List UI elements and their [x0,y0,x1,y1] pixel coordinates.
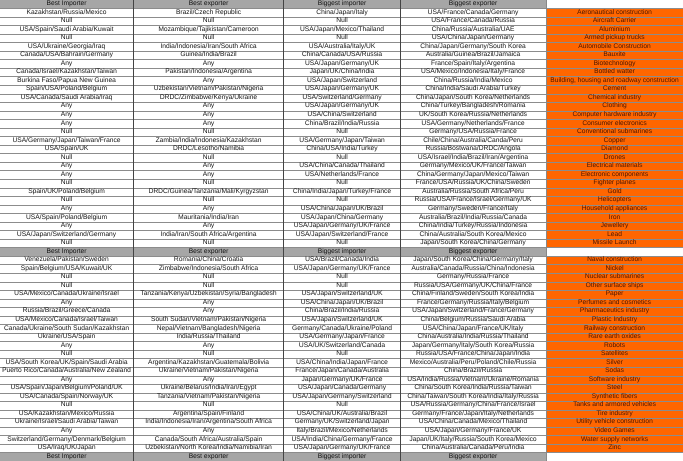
rows: section one, aeronautical construction to missile launch: USA/Japan/Germany/UK [305,60,379,67]
rows: section two, naval construction to zinc: Italy/Brazil/Mexico/Netherlands [296,427,388,434]
rows: section one, aeronautical construction to missile launch: Null [203,128,214,135]
rows: section two, naval construction to zinc: Synthetic fibers [592,393,637,400]
header row: top: Biggest exporter [449,0,497,7]
rows: section two, naval construction to zinc: Plastic Industry [592,316,637,323]
rows: section two, naval construction to zinc: USA/Japan/Germany/UK/France [294,265,390,272]
rows: section two, naval construction to zinc: India/Indonesia/Iran/Argentina/South Africa [145,418,272,425]
rows: section one, aeronautical construction to missile launch: Null [336,34,348,41]
rows: section one, aeronautical construction to missile launch: Any [61,111,72,118]
rows: section one, aeronautical construction to missile launch: Null [61,128,72,135]
rows: section one, aeronautical construction to missile launch: DRDC/Guinea/Tanzania/Mali/Kyrgyzstan [149,188,268,195]
header row: top: Best Importer [47,0,86,7]
rows: section one, aeronautical construction to missile launch: Germany/Mexico/UK/France/Taiwan [420,162,526,169]
rows: section two, naval construction to zinc: Naval construction [587,256,642,263]
rows: section one, aeronautical construction to missile launch: Copper [604,137,625,144]
rows: section two, naval construction to zinc: Rare earth oxides [588,333,641,340]
rows: section one, aeronautical construction to missile launch: China/Brazil/India/Russia [305,120,379,127]
rows: section two, naval construction to zinc: Any [203,299,214,306]
rows: section two, naval construction to zinc: France/Japan/Canada/Australia [295,367,389,374]
rows: section one, aeronautical construction to missile launch: France/Spain/Italy/Argentina [431,60,515,67]
rows: section two, naval construction to zinc: Canada/Ukraine/South Sudan/Kazakhstan [4,325,129,332]
rows: section one, aeronautical construction to missile launch: USA/Spain/Saudi Arabia/Kuwait [20,26,113,33]
rows: section one, aeronautical construction to missile launch: Mozambique/Tajikistan/Cameroon [158,26,259,33]
rows: section one, aeronautical construction to missile launch: Drones [604,154,625,161]
rows: section one, aeronautical construction to missile launch: Cement [603,85,626,92]
rows: section two, naval construction to zinc: Puerto Rico/Canada/Australia/New Zealand [2,367,131,374]
header row: bottom: Best Importer [47,453,86,460]
rows: section one, aeronautical construction to missile launch: Clothing [602,102,627,109]
rows: section two, naval construction to zinc: Japan/Germany/UK/France [301,376,383,383]
rows: section one, aeronautical construction to missile launch: Bottled watter [594,68,635,75]
rows: section one, aeronautical construction to missile launch: Lead [607,231,622,238]
rows: section one, aeronautical construction to missile launch: Japan/South Korea/China/Germany [420,239,526,246]
rows: section one, aeronautical construction to missile launch: Electronic components [581,171,648,178]
rows: section one, aeronautical construction to missile launch: Null [61,239,72,246]
rows: section two, naval construction to zinc: USA/Japan/Germany/UK/France [294,444,390,451]
rows: section one, aeronautical construction to missile launch: USA/Germany/Netherlands/France [421,120,525,127]
header row: top: Best exporter [189,0,228,7]
rows: section two, naval construction to zinc: Germany/Russia/France [437,273,509,280]
rows: section two, naval construction to zinc: Robots [604,342,625,349]
rows: section two, naval construction to zinc: China/Brazil/Russia [444,367,502,374]
header row: top: Biggest importer [318,0,366,7]
header row: middle: Best Importer [47,248,86,255]
rows: section one, aeronautical construction to missile launch: China/Canada/USA/Russia [302,51,382,58]
rows: section one, aeronautical construction to missile launch: Australia/Guinea/Brazil/Jamaica [426,51,520,58]
rows: section one, aeronautical construction to missile launch: India/Indonesia/Iran/South Africa [160,43,257,50]
rows: section two, naval construction to zinc: Null [336,282,348,289]
rows: section two, naval construction to zinc: Null [61,282,72,289]
rows: section one, aeronautical construction to missile launch: Any [61,102,72,109]
rows: section one, aeronautical construction to missile launch: Null [203,239,214,246]
rows: section one, aeronautical construction to missile launch: Null [336,239,348,246]
rows: section two, naval construction to zinc: USA/Japan/Germany/Switzerland [292,393,392,400]
rows: section one, aeronautical construction to missile launch: China/Australia/South Korea/Mexico [420,231,526,238]
rows: section one, aeronautical construction to missile launch: Aircraft Carrier [593,17,636,24]
rows: section two, naval construction to zinc: Venezuela/Pakistan/Sweden [24,256,109,263]
rows: section one, aeronautical construction to missile launch: Null [203,196,214,203]
rows: section two, naval construction to zinc: Romania/China/Croatia [174,256,243,263]
rows: section two, naval construction to zinc: Null [61,273,72,280]
orange category column: second section [546,256,683,452]
rows: section two, naval construction to zinc: Null [336,273,348,280]
rows: section two, naval construction to zinc: China/Belgium/Russia/Saudi Arabia [420,316,526,323]
header row: middle: Biggest exporter [449,248,497,255]
rows: section one, aeronautical construction to missile launch: Australia/Brazil/India/Russia/Canada [419,214,527,220]
rows: section two, naval construction to zinc: Canada/South Africa/Australia/Spain [155,436,262,443]
rows: section two, naval construction to zinc: USA/Kazakhstan/Mexico/Russia [19,410,114,417]
rows: section two, naval construction to zinc: Null [336,401,348,408]
rows: section two, naval construction to zinc: Null [203,350,214,357]
rows: section one, aeronautical construction to missile launch: USA/Japan/Germany/UK/France [294,222,390,229]
rows: section one, aeronautical construction to missile launch: Any [61,120,72,127]
rows: section two, naval construction to zinc: Russia/USA/Germany/UK/China/France [414,282,532,289]
rows: section one, aeronautical construction to missile launch: USA/China/Japan/Germany [432,34,514,41]
rows: section one, aeronautical construction to missile launch: Any [61,60,72,67]
rows: section one, aeronautical construction to missile launch [12,9,679,246]
rows: section one, aeronautical construction to missile launch: Any [61,162,72,169]
rows: section two, naval construction to zinc: USA/Canada/Spain/Norway/UK [20,393,113,400]
rows: section two, naval construction to zinc: Japan/UK/Italy/Russia/South Korea/Mexico [409,436,537,443]
rows: section two, naval construction to zinc: Argentina/Spain/Finland [173,410,244,417]
rows: section one, aeronautical construction to missile launch: USA/France/Canada/Germany [428,9,518,16]
rows: section two, naval construction to zinc: Germany/France/Japan/Italy/Netherlands [412,410,534,417]
rows: section one, aeronautical construction to missile launch: Guinea/India/Brazil [180,51,237,58]
rows: section two, naval construction to zinc: China/Brazil/India/Russia [305,307,379,314]
rows: section one, aeronautical construction to missile launch: China/Germany/Japan/Mexico/Taiwan [417,171,529,178]
rows: section one, aeronautical construction to missile launch: Iron [609,214,620,220]
rows: section two, naval construction to zinc: USA/Japan/Canada/Germany [298,384,386,391]
rows: section one, aeronautical construction to missile launch: USA/China/Canada/Thailand [299,162,385,169]
rows: section one, aeronautical construction to missile launch: USA/Japan/Germany/UK [305,102,379,109]
rows: section one, aeronautical construction to missile launch: Mauritania/India/Iran [178,214,239,220]
rows: section one, aeronautical construction to missile launch: Building, housing and roadway construction [550,77,679,84]
rows: section one, aeronautical construction to missile launch: Bauxite [603,51,626,58]
rows: section one, aeronautical construction to missile launch: Chile/China/Australia/Canda/Peru [423,137,523,144]
rows: section one, aeronautical construction to missile launch: China/Japan/Italy [316,9,368,16]
rows: section one, aeronautical construction to missile launch: Japan/UK/China/India [310,68,374,75]
rows: section two, naval construction to zinc: Spain/Belgium/USA/Kuwait/UK [21,265,112,272]
rows: section two, naval construction to zinc: Australia/Canada/Russia/China/Indonesia [411,265,535,272]
rows: section one, aeronautical construction to missile launch: India/Iran/South Africa/Argentina [161,231,256,238]
header row: middle: Biggest importer [318,248,366,255]
rows: section one, aeronautical construction to missile launch: Canada/Israel/Kazakhstan/Taiwan [16,68,117,75]
rows: section two, naval construction to zinc: Ukraine/USA/Spain [38,333,95,340]
rows: section one, aeronautical construction to missile launch: Any [203,120,214,127]
rows: section one, aeronautical construction to missile launch: USA/Spain/Poland/Belgium [26,214,107,220]
rows: section one, aeronautical construction to missile launch: China/Russia/India/Mexico [434,77,512,84]
rows: section one, aeronautical construction to missile launch: Canada/USA/Bahrain/Germany [20,51,113,58]
rows: section two, naval construction to zinc: Any [203,342,214,349]
rows: section two, naval construction to zinc: Argentina/Kazakhstan/Guatemala/Bolivia [148,359,269,366]
rows: section one, aeronautical construction to missile launch: Fighter planes [593,179,636,186]
rows: section one, aeronautical construction to missile launch: USA/Japan/Switzerland/Germany [17,231,116,238]
rows: section one, aeronautical construction to missile launch: USA/Germany/Japan/Taiwan [299,137,385,144]
rows: section two, naval construction to zinc: Any [61,342,72,349]
rows: section one, aeronautical construction to missile launch: Any [203,171,214,178]
rows: section two, naval construction to zinc: China/Taiwan/South Korea/India/Italy/Russia [407,393,539,400]
rows: section two, naval construction to zinc: USA/South Korea/UK/Spain/Saudi Arabia [5,359,128,366]
header row: bottom [47,453,498,460]
rows: section one, aeronautical construction to missile launch: Diamond [601,145,628,152]
rows: section one, aeronautical construction to missile launch: USA/Japan/Switzerland/France [296,231,388,238]
rows: section two, naval construction to zinc: Paper [606,290,623,297]
rows: section two, naval construction to zinc: Tanks and armored vehicles [573,401,656,408]
rows: section two, naval construction to zinc: USA/Brazil/Canada/India [305,256,379,263]
rows: section one, aeronautical construction to missile launch: Null [336,154,348,161]
rows: section one, aeronautical construction to missile launch: Chemical industry [588,94,641,101]
rows: section one, aeronautical construction to missile launch: USA/Japan/Switzerland [307,77,377,84]
rows: section one, aeronautical construction to missile launch: Null [203,154,214,161]
rows: section one, aeronautical construction to missile launch: Null [336,196,348,203]
rows: section two, naval construction to zinc: Nickel [605,265,624,272]
rows: section one, aeronautical construction to missile launch: USA/Ukraine/Georgia/Iraq [28,43,105,50]
rows: section one, aeronautical construction to missile launch: USA/Japan/Germany/UK [305,85,379,92]
rows: section one, aeronautical construction to missile launch: USA/Mexico/Indonesia/Italy/France [421,68,525,75]
rows: section two, naval construction to zinc: Any [203,376,214,383]
rows: section one, aeronautical construction to missile launch: USA/Australia/Italy/UK [309,43,375,50]
rows: section two, naval construction to zinc: Satellites [601,350,628,357]
rows: section one, aeronautical construction to missile launch: Any [203,102,214,109]
rows: section two, naval construction to zinc: USA/China/Canada/Mexico/Thailand [419,418,527,425]
rows: section one, aeronautical construction to missile launch: Australia/Russia/South Africa/Peru [422,188,524,195]
rows: section two, naval construction to zinc: Any [203,307,214,314]
rows: section one, aeronautical construction to missile launch: Null [336,179,348,186]
rows: section two, naval construction to zinc: Any [203,427,214,434]
rows: section one, aeronautical construction to missile launch: Russia/Bostwana/DRDC/Angola [425,145,521,152]
rows: section one, aeronautical construction to missile launch: DRDC/Zimbabwe/Kenya/Ukraine [160,94,257,101]
rows: section one, aeronautical construction to missile launch: China/India/Japan/Turkey/France [293,188,391,195]
rows: section one, aeronautical construction to missile launch: Pakistan/Indonesia/Argentina [165,68,252,75]
rows: section two, naval construction to zinc: Mexico/Australia/Peru/Poland/Chile/Russia [410,359,536,366]
rows: section two, naval construction to zinc: Any [61,427,72,434]
rows: section one, aeronautical construction to missile launch: China/Japan/Germany/South Korea [420,43,526,50]
rows: section one, aeronautical construction to missile launch: China/Japan/South Korea/Netherlands [416,94,530,101]
header row: bottom: Biggest exporter [449,453,497,460]
rows: section two, naval construction to zinc: Silver [606,359,623,366]
rows: section one, aeronautical construction to missile launch: USA/Canada/Saudi Arabia/Iraq [21,94,112,101]
rows: section one, aeronautical construction to missile launch: Null [203,17,214,24]
rows: section one, aeronautical construction to missile launch: Burkina Faso/Papua New Guinea [17,77,116,84]
rows: section two, naval construction to zinc: South Sudan/Vietnam/Pakistan/Nigeria [151,316,266,323]
rows: section one, aeronautical construction to missile launch: Null [203,179,214,186]
rows: section two, naval construction to zinc: USA/China/UK/Australia/Brazil [297,410,387,417]
rows: section one, aeronautical construction to missile launch: Computer hardware industry [572,111,656,118]
rows: section two, naval construction to zinc: Utility vehicle construction [576,418,653,425]
rows: section one, aeronautical construction to missile launch: Any [203,111,214,118]
rows: section two, naval construction to zinc: Nuclear submarines [585,273,644,280]
rows: section one, aeronautical construction to missile launch: Null [61,179,72,186]
rows: section one, aeronautical construction to missile launch: Spain/USA/Poland/Belgium [26,85,107,92]
rows: section two, naval construction to zinc: Software industry [589,376,640,383]
rows: section one, aeronautical construction to missile launch: USA/Switzerland/Germany [302,94,382,101]
rows: section two, naval construction to zinc: Water supply networks [581,436,648,443]
rows: section one, aeronautical construction to missile launch: USA/Germany/Japan/Taiwan/France [12,137,121,144]
rows: section two, naval construction to zinc: USA/Japan/Switzerland/UK [301,316,383,323]
header row: middle [47,248,498,255]
rows: section one, aeronautical construction to missile launch: USA/Spain/UK [45,145,88,152]
rows: section two, naval construction to zinc: Ukraine/Israel/Saudi Arabia/Taiwan [15,418,118,425]
header row: top [47,0,498,7]
rows: section one, aeronautical construction to missile launch: UK/South Korea/Russia/Netherlands [419,111,527,118]
rows: section one, aeronautical construction to missile launch: Russia/USA/France/Israel/Germany/UK [415,196,531,203]
rows: section one, aeronautical construction to missile launch: USA/Japan/Mexico/Thailand [300,26,384,33]
rows: section two, naval construction to zinc: Null [203,401,214,408]
middle header background [0,248,546,256]
header row: bottom: Best exporter [189,453,228,460]
rows: section one, aeronautical construction to missile launch: DRDC/Lesotho/Namibia [173,145,244,152]
rows: section two, naval construction to zinc: USA/China/Japan/UK/Brazil [301,299,383,306]
rows: section one, aeronautical construction to missile launch: Null [203,34,214,41]
rows: section one, aeronautical construction to missile launch: Any [203,162,214,169]
rows: section two, naval construction to zinc: USA/Japan/Germany/France/UK [425,427,521,434]
rows: section one, aeronautical construction to missile launch: Missile Launch [592,239,637,246]
rows: section two, naval construction to zinc: USA/Russia/Germany/China/France/Israel [410,401,536,408]
rows: section two, naval construction to zinc: Uzbekistan/North Korea/India/Namibia/Iran [145,444,272,451]
rows: section one, aeronautical construction to missile launch: China/USA/India/Turkey [306,145,378,152]
rows: section two, naval construction to zinc: Russia/USA/France/China/Japan/India [416,350,530,357]
rows: section two, naval construction to zinc: India/Russia/Thailand [176,333,240,340]
rows: section one, aeronautical construction to missile launch: Aeronautical construction [577,9,652,16]
rows: section two, naval construction to zinc: USA/Japan/Switzerland/UK [301,290,383,297]
rows: section one, aeronautical construction to missile launch: Brazil/Czech Republic [176,9,241,16]
rows: section two, naval construction to zinc: Steel [607,384,622,391]
rows: section two, naval construction to zinc: Video Games [594,427,635,434]
rows: section two, naval construction to zinc: Zinc [608,444,621,451]
rows: section two, naval construction to zinc: Tanzania/Kenya/Uzbekistan/Syria/Bangladesh [140,290,277,297]
rows: section two, naval construction to zinc: Switzerland/Germany/Denmark/Belgium [7,436,126,443]
rows: section two, naval construction to zinc: Japan/South Korea/China/Germany/Italy [413,256,533,263]
rows: section one, aeronautical construction to missile launch: China/India/Turkey/Russia/Indonesia [419,222,527,229]
rows: section two, naval construction to zinc: France/Germany/Russia/Italy/Belgium [417,299,529,306]
rows: section one, aeronautical construction to missile launch: USA/China/Switzerland [307,111,377,118]
rows: section two, naval construction to zinc: USA/Spain/Japan/Belgium/Poland/UK [10,384,123,391]
rows: section two, naval construction to zinc: USA/UK/Switzerland/Canada [299,342,385,349]
rows: section one, aeronautical construction to missile launch: Kazakhstan/Russia/Mexico [27,9,106,16]
rows: section one, aeronautical construction to missile launch: USA/Japan/China/Germany [301,214,383,220]
orange category column: first section [546,8,683,248]
rows: section two, naval construction to zinc: Null [61,401,72,408]
rows: section one, aeronautical construction to missile launch: Any [61,171,72,178]
rows: section two, naval construction to zinc: Sodas [605,367,624,374]
bottom header background [0,452,546,461]
rows: section two, naval construction to zinc: USA/Mexico/Canada/Ukraine/Israel [14,290,119,297]
rows: section one, aeronautical construction to missile launch: Null [61,196,72,203]
rows: section one, aeronautical construction to missile launch: Germany/Sweden/France/Italy [428,205,518,212]
rows: section two, naval construction to zinc: USA/Iraq/UK/Japan [37,444,96,451]
rows: section one, aeronautical construction to missile launch: Helicopters [598,196,631,203]
rows: section two, naval construction to zinc: Null [203,273,214,280]
rows: section two, naval construction to zinc: China/Australia/Canada/Peru/India [422,444,524,451]
rows: section one, aeronautical construction to missile launch: China/India/Saudi Arabia/Turkey [425,85,521,92]
header row: bottom: Biggest importer [318,453,366,460]
rows: section one, aeronautical construction to missile launch: Aluminium [599,26,630,33]
rows: section one, aeronautical construction to missile launch: Household appliances [582,205,647,212]
rows: section one, aeronautical construction to missile launch: Germany/USA/Russia/France [429,128,517,135]
rows: section two, naval construction to zinc: Null [336,350,348,357]
rows: section two, naval construction to zinc: China/Finland/Sweden/South Korea/India [412,290,534,297]
rows: section two, naval construction to zinc: Other surface ships [586,282,643,289]
rows: section two, naval construction to zinc: USA/Japan/Switzerland/France/Germany [412,307,534,314]
rows: section one, aeronautical construction to missile launch: Null [61,17,72,24]
rows: section two, naval construction to zinc: Tire industry [596,410,633,417]
rows: section two, naval construction to zinc: Ukraine/Vietnam/Pakistan/Nigeria [159,367,258,374]
rows: section two, naval construction to zinc: Railway construction [584,325,645,332]
rows: section two, naval construction to zinc: China/South Korea/India/Russia/Taiwan [414,384,532,391]
rows: section one, aeronautical construction to missile launch: Conventional submarines [577,128,652,135]
rows: section one, aeronautical construction to missile launch: Any [203,222,214,229]
rows: section one, aeronautical construction to missile launch: China/Russia/Australia/UAE [432,26,514,33]
rows: section one, aeronautical construction to missile launch: China/Turkey/Bangladesh/Romania [421,102,525,109]
rows: section two, naval construction to zinc: USA/India/Russia/Vietnam/Ukraine/Romania [407,376,539,383]
rows: section one, aeronautical construction to missile launch: Any [203,205,214,212]
rows: section one, aeronautical construction to missile launch: Null [61,34,72,41]
rows: section one, aeronautical construction to missile launch: Any [61,205,72,212]
rows: section two, naval construction to zinc: Germany/Canada/Ukraine/Poland [292,325,392,332]
rows: section one, aeronautical construction to missile launch: Any [203,60,214,67]
rows: section two, naval construction to zinc: Nepal/Vietnam/Bangladesh/Nigeria [157,325,260,332]
rows: section one, aeronautical construction to missile launch: Electrical materials [587,162,642,169]
rows: section one, aeronautical construction to missile launch: Null [61,154,72,161]
rows: section one, aeronautical construction to missile launch: Any [203,77,214,84]
rows: section two, naval construction to zinc: USA/China/Japan/France/UK/Italy [423,325,523,332]
rows: section one, aeronautical construction to missile launch: USA/France/Canada/Russia [431,17,515,24]
rows: section one, aeronautical construction to missile launch: Jewellery [601,222,628,229]
top header background [0,0,546,8]
rows: section one, aeronautical construction to missile launch: Spain/UK/Poland/Belgium [28,188,105,195]
rows: section one, aeronautical construction to missile launch: Consumer electronics [582,120,647,127]
rows: section one, aeronautical construction to missile launch: France/USA/Russia/UK/China/Sweden [416,179,530,186]
rows: section two, naval construction to zinc: Perfumes and cosmetics [578,299,651,306]
rows: section one, aeronautical construction to missile launch: Null [336,17,348,24]
header row: middle: Best exporter [189,248,228,255]
rows: section one, aeronautical construction to missile launch: Null [336,128,348,135]
rows: section two, naval construction to zinc: Japan/Germany/Italy/South Korea/Russia [412,342,534,349]
rows: section one, aeronautical construction to missile launch: Automobile Construction [578,43,651,50]
rows: section two, naval construction to zinc: Null [203,282,214,289]
rows: section one, aeronautical construction to missile launch: Armed pickup trucks [584,34,645,41]
rows: section one, aeronautical construction to missile launch: Zambia/India/Indonesia/Kazakhstan [156,137,261,144]
rows: section two, naval construction to zinc: Any [61,376,72,383]
rows: section two, naval construction to zinc: Tanzania/Vietnam/Pakistan/Nigeria [157,393,260,400]
rows: section one, aeronautical construction to missile launch: USA/China/Japan/UK/Brazil [301,205,383,212]
rows: section one, aeronautical construction to missile launch: Any [61,222,72,229]
rows: section two, naval construction to zinc: Null [61,350,72,357]
rows: section two, naval construction to zinc: Ukraine/Belarus/India/Iran/Egypt [161,384,256,391]
rows: section two, naval construction to zinc: USA/India/China/Germany/France [292,436,392,443]
rows: section one, aeronautical construction to missile launch: Biotechnology [594,60,635,67]
rows: section one, aeronautical construction to missile launch: USA/Israel/India/Brazil/Iran/Argentina [418,154,528,161]
rows: section two, naval construction to zinc: USA/Germany/Japan/France [299,333,385,340]
rows: section two, naval construction to zinc: Pharmaceutics industry [580,307,649,314]
rows: section two, naval construction to zinc: Zimbabwe/Indonesia/South Africa [159,265,258,272]
rows: section two, naval construction to zinc: Russia/Brazil/Greece/Canada [23,307,110,314]
rows: section one, aeronautical construction to missile launch: Gold [607,188,622,195]
rows: section one, aeronautical construction to missile launch: USA/Netherlands/France [305,171,379,178]
rows: section two, naval construction to zinc: USA/China/India/Japan/France [296,359,388,366]
rows: section two, naval construction to zinc: Any [61,299,72,306]
rows: section two, naval construction to zinc: Germany/UK/Switzerland/Japan [295,418,389,425]
rows: section two, naval construction to zinc: USA/Mexico/Canada/Israel/Taiwan [15,316,118,323]
rows: section one, aeronautical construction to missile launch: Uzbekistan/Vietnam/Pakistan/Nigeria [154,85,263,92]
rows: section two, naval construction to zinc: China/Australia/India/Russia/Thailand [418,333,528,340]
